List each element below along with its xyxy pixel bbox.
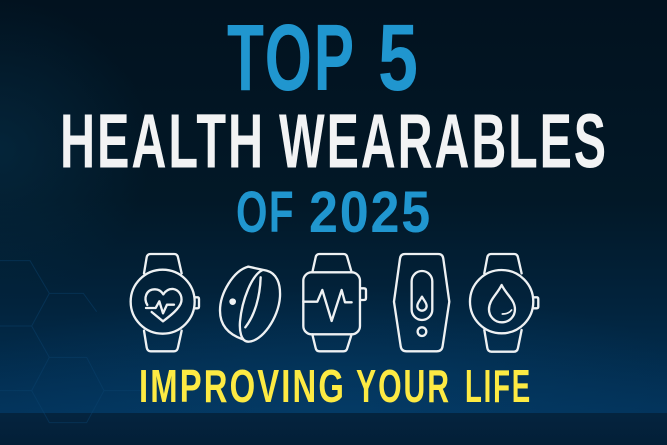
icon: heart rate smartwatch: [131, 254, 199, 351]
title: top 5: TOP: [227, 5, 356, 111]
icon row: [131, 254, 538, 352]
tagline: IMPROVING: [139, 360, 346, 412]
icon: ecg square smartwatch: [303, 254, 366, 351]
hexagon pattern: [0, 261, 147, 423]
title: of 2025: OF: [236, 180, 295, 245]
title: top 5: 5: [378, 5, 418, 111]
icon: smart ring: [220, 267, 280, 342]
tagline: YOUR: [356, 360, 451, 412]
icon: fitness band with drop: [394, 254, 449, 351]
title: health wearables: HEALTH: [60, 100, 265, 185]
title: of 2025: 2025: [309, 180, 432, 245]
tagline: LIFE: [465, 360, 532, 412]
title: health wearables: [60, 100, 608, 185]
icon: hydration smartwatch: [470, 254, 538, 352]
title: of 2025: [236, 180, 432, 245]
